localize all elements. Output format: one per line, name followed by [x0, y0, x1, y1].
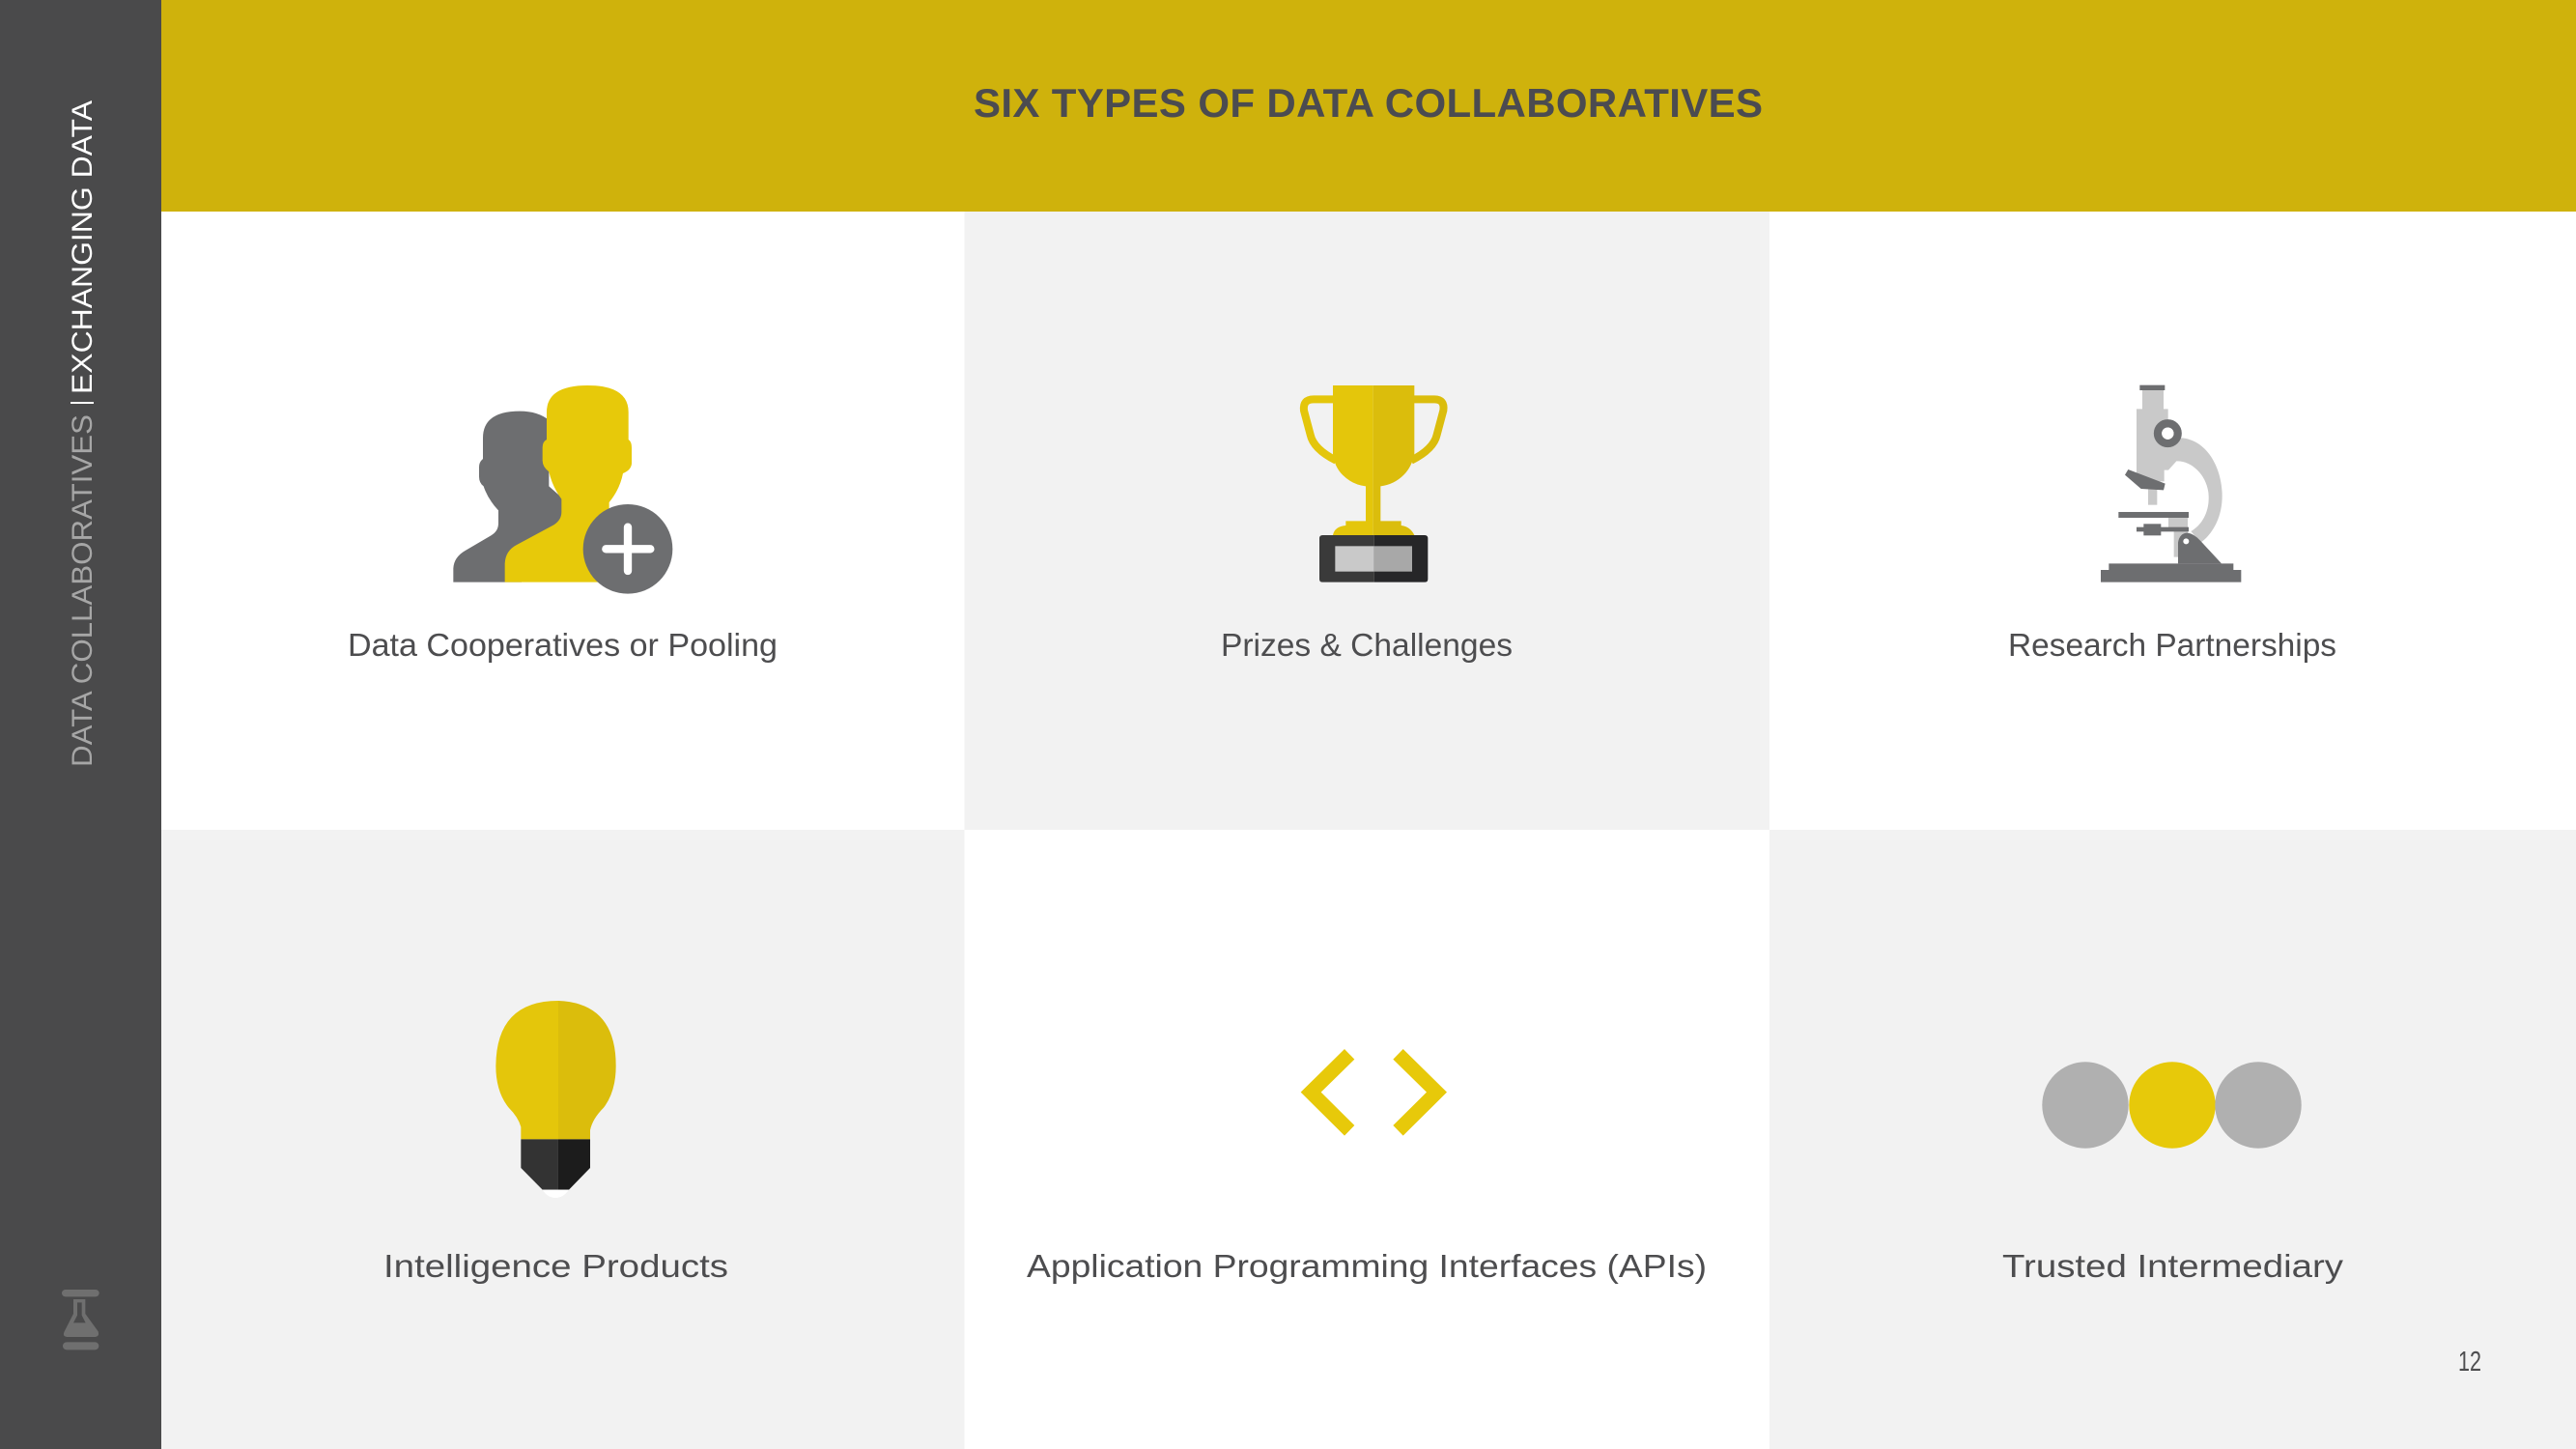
icon: three circles	[2042, 1062, 2302, 1149]
icon: light bulb	[495, 1001, 616, 1198]
sidebar	[0, 0, 161, 1449]
panel: prizes and challenges	[964, 211, 1769, 830]
page number: 12	[2458, 1347, 2481, 1378]
icon: trophy	[1304, 385, 1444, 582]
label: intelligence products: Intelligence Products	[383, 1248, 728, 1284]
label: trusted intermediary: Trusted Intermediary	[2002, 1248, 2344, 1284]
sidebar section title: EXCHANGING DATA	[67, 100, 99, 394]
label: data cooperatives or pooling: Data Cooperatives or Pooling	[348, 627, 778, 663]
panel: trusted intermediary	[1769, 830, 2576, 1449]
title: SIX TYPES OF DATA COLLABORATIVES	[974, 80, 1763, 126]
icon: microscope	[2101, 385, 2241, 582]
icon: flask	[62, 1290, 99, 1350]
sidebar section title	[67, 100, 99, 767]
label: application programming interfaces: Application Programming Interfaces (APIs)	[1027, 1248, 1707, 1284]
panel: application programming interfaces	[964, 830, 1769, 1449]
panel: intelligence products	[161, 830, 964, 1449]
sidebar section title: DATA COLLABORATIVES	[67, 414, 99, 767]
label: prizes and challenges: Prizes & Challenges	[1221, 627, 1513, 663]
header band	[161, 0, 2576, 212]
label: research partnerships: Research Partnerships	[2008, 627, 2336, 663]
icon: code brackets	[1301, 1049, 1447, 1136]
panel: research partnerships	[1769, 211, 2576, 830]
icon: two people with plus badge	[453, 385, 672, 594]
panel: data cooperatives or pooling	[161, 211, 964, 830]
